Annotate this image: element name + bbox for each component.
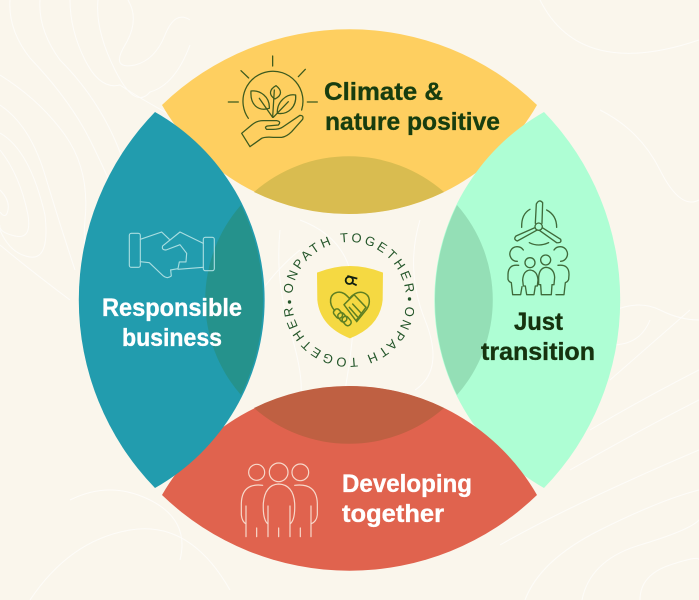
heading: just transition: transition	[481, 338, 595, 366]
ring dot left	[288, 300, 291, 304]
overlap: responsible business	[205, 205, 263, 395]
panel: climate and nature positive	[162, 29, 537, 214]
overlap: just transition	[435, 205, 493, 395]
ring text: onpath together: ONPATH TOGETHER ONPATH TOGETHER	[284, 233, 414, 367]
heading: developing together: Developing	[342, 470, 472, 498]
icon: wind turbine and family	[508, 201, 569, 295]
heading: responsible business: Responsible	[102, 294, 242, 322]
heading: climate and nature positive: Climate &	[324, 78, 443, 106]
panel: responsible business	[79, 112, 265, 488]
icon: plant in hand under sun	[228, 56, 317, 147]
ring dot right	[408, 297, 411, 301]
shield with heart handshake	[317, 266, 383, 338]
heading: just transition: Just	[514, 308, 564, 336]
heading: climate and nature positive: nature positive	[325, 108, 500, 136]
heading: developing together: together	[342, 500, 444, 528]
icon: handshake	[129, 232, 214, 278]
heading: responsible business: business	[122, 324, 222, 352]
overlap: developing together	[254, 386, 444, 444]
badge: OnPath Together logo	[284, 233, 414, 367]
panel: developing together	[162, 386, 537, 571]
icon: three people	[241, 463, 317, 537]
panel: just transition	[434, 112, 620, 488]
overlap: climate	[254, 156, 444, 214]
